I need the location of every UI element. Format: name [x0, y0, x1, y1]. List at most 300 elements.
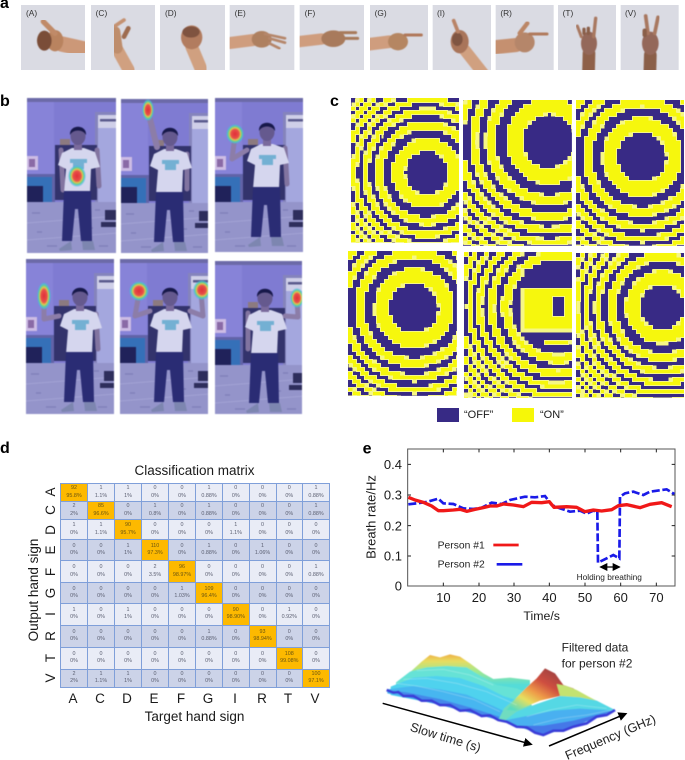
- confusion matrix table: 0: [234, 651, 237, 657]
- photo (A): [21, 5, 92, 70]
- confusion matrix table: 0: [126, 503, 130, 509]
- confusion matrix table: 0%: [232, 493, 240, 499]
- output class labels: T: [43, 654, 58, 662]
- confusion matrix table: 109: [204, 586, 214, 592]
- confusion matrix table: 0%: [178, 493, 186, 499]
- confusion matrix table: 0: [180, 651, 184, 657]
- confusion matrix table: 0: [180, 503, 184, 509]
- photo (C): (C): [96, 8, 107, 18]
- confusion matrix table: 1: [100, 671, 102, 677]
- photo (R): (R): [500, 8, 512, 18]
- photo (D): (D): [165, 8, 177, 18]
- confusion matrix table: 0%: [124, 572, 132, 578]
- confusion matrix table: 90: [125, 522, 131, 528]
- y axis tick labels: 0.2: [384, 518, 402, 533]
- confusion matrix table: 0: [288, 522, 291, 528]
- confusion matrix table: 0%: [312, 658, 320, 664]
- confusion matrix table: 2: [154, 564, 156, 570]
- photo (C): [91, 5, 155, 78]
- confusion matrix table: 0: [100, 564, 102, 570]
- confusion matrix table: 0: [208, 522, 210, 528]
- filtered data callout: [562, 641, 633, 671]
- panel a: hand sign photographs: [0, 0, 679, 70]
- y axis title: Breath rate/Hz: [364, 475, 379, 559]
- confusion matrix table: 1: [234, 522, 237, 528]
- confusion matrix table: 1: [126, 543, 130, 549]
- confusion matrix table: 0: [180, 543, 184, 549]
- confusion matrix table: 1%: [124, 550, 132, 556]
- confusion matrix table: 0: [234, 485, 237, 491]
- confusion matrix table: 1.1%: [230, 530, 242, 536]
- confusion matrix table: 0: [261, 485, 264, 491]
- confusion matrix table: 0%: [124, 658, 132, 664]
- output class labels: G: [43, 588, 58, 598]
- photo (I): [433, 5, 491, 80]
- confusion matrix table: 0%: [97, 614, 105, 620]
- confusion matrix table: 1: [100, 485, 102, 491]
- person 1 solid line: [408, 497, 672, 512]
- photo: arm raised high: [120, 98, 209, 254]
- coding pattern 5: [464, 252, 572, 398]
- confusion matrix table: 0.88%: [201, 493, 217, 499]
- confusion matrix table: 0%: [232, 593, 240, 599]
- confusion matrix table: 1: [100, 522, 102, 528]
- confusion matrix table: 0%: [312, 550, 320, 556]
- confusion matrix table: 0.88%: [308, 511, 324, 517]
- confusion matrix table: 0%: [259, 593, 266, 599]
- confusion matrix table: 85: [98, 503, 104, 509]
- target class labels: T: [284, 691, 292, 706]
- confusion matrix table: 0%: [285, 511, 293, 517]
- confusion matrix table: 1: [126, 671, 130, 677]
- confusion matrix table: 0: [154, 522, 156, 528]
- confusion matrix table: 0%: [205, 678, 213, 684]
- confusion matrix table: 0: [288, 586, 291, 592]
- confusion matrix table: 96: [179, 564, 185, 570]
- output class labels: I: [43, 612, 58, 616]
- confusion matrix table: 96.4%: [201, 593, 217, 599]
- photo (G): [360, 5, 428, 70]
- confusion matrix table: 0%: [97, 658, 105, 664]
- output class labels: R: [43, 631, 58, 641]
- person 2 dashed line: [408, 489, 674, 563]
- photo (T): (T): [563, 8, 574, 18]
- confusion matrix table: 0: [261, 503, 264, 509]
- confusion matrix table: 0%: [151, 658, 159, 664]
- confusion matrix table: 0: [154, 586, 156, 592]
- confusion matrix table: 1: [208, 503, 210, 509]
- confusion matrix table: 0%: [285, 572, 293, 578]
- confusion matrix table: 0%: [151, 636, 159, 642]
- confusion matrix table: 0: [180, 671, 184, 677]
- legend: ON: [512, 408, 564, 422]
- confusion matrix table: 0: [261, 564, 264, 570]
- confusion matrix table: 1: [314, 485, 318, 491]
- confusion matrix table: 0: [261, 607, 264, 613]
- confusion matrix table: 2%: [70, 678, 78, 684]
- confusion matrix table: 0%: [285, 530, 293, 536]
- photo (V): (V): [625, 8, 636, 18]
- y axis tick labels: 0.4: [384, 457, 402, 472]
- confusion matrix table: 0: [154, 485, 156, 491]
- confusion matrix table: 0%: [205, 530, 213, 536]
- confusion matrix table: 1: [72, 607, 76, 613]
- confusion matrix table: 0%: [178, 678, 186, 684]
- confusion matrix table: 0: [234, 503, 237, 509]
- target class labels: F: [177, 691, 185, 706]
- confusion matrix table: 0%: [312, 530, 320, 536]
- confusion matrix table: 0%: [285, 636, 293, 642]
- confusion matrix table: 0%: [232, 658, 240, 664]
- x axis title: Time/s: [523, 609, 560, 623]
- confusion matrix table: 0%: [97, 593, 105, 599]
- confusion matrix table: 97.3%: [147, 550, 163, 556]
- confusion matrix table: 0: [208, 671, 210, 677]
- confusion matrix table: 0%: [151, 614, 159, 620]
- x axis tick labels: 50: [578, 590, 592, 605]
- confusion matrix table: 0: [100, 629, 102, 635]
- confusion matrix table: 0: [234, 543, 237, 549]
- x axis tick labels: 60: [613, 590, 628, 605]
- target class labels: A: [68, 691, 78, 706]
- confusion matrix table: 0: [314, 629, 318, 635]
- confusion matrix table: 0: [288, 503, 291, 509]
- confusion matrix table: 2%: [70, 511, 78, 517]
- legend: OFF: [437, 408, 493, 422]
- confusion matrix table: 0%: [259, 511, 266, 517]
- panel d: classification matrix: [0, 440, 330, 724]
- confusion matrix table: 95.7%: [120, 530, 136, 536]
- confusion matrix table: 0%: [178, 530, 186, 536]
- confusion matrix table: 0%: [259, 530, 266, 536]
- coding pattern 1: [351, 98, 459, 243]
- confusion matrix table: 0: [261, 522, 264, 528]
- confusion matrix table: 1: [261, 543, 264, 549]
- confusion matrix table: 0: [314, 607, 318, 613]
- confusion matrix table: 0%: [285, 550, 293, 556]
- filtered data callout: Filtered data: [562, 641, 629, 655]
- x axis tick labels: 10: [436, 590, 451, 605]
- confusion matrix table: 0%: [124, 511, 132, 517]
- confusion matrix table: 100: [312, 671, 320, 677]
- photo (F): (F): [305, 8, 316, 18]
- target class labels: R: [257, 691, 267, 706]
- confusion matrix table: 108: [285, 651, 294, 657]
- confusion matrix table: [60, 483, 330, 688]
- confusion matrix table: 0%: [312, 593, 320, 599]
- x axis tick labels: [436, 590, 664, 605]
- confusion matrix table: 2: [72, 671, 76, 677]
- confusion matrix table: 0: [154, 629, 156, 635]
- confusion matrix table: 0%: [178, 550, 186, 556]
- confusion matrix table: 0%: [259, 678, 266, 684]
- confusion matrix table: 0: [234, 564, 237, 570]
- confusion matrix table: 0: [100, 607, 102, 613]
- coding pattern 6: [576, 253, 684, 398]
- confusion matrix table: 1: [288, 607, 291, 613]
- legend: OFF: “OFF”: [464, 409, 493, 421]
- confusion matrix table: 0: [234, 629, 237, 635]
- confusion matrix table: 0%: [97, 636, 105, 642]
- confusion matrix table: 0: [100, 586, 102, 592]
- confusion matrix table: 99.08%: [280, 658, 298, 664]
- confusion matrix table: 0%: [232, 636, 240, 642]
- confusion matrix table: 0: [261, 671, 264, 677]
- panel e: breath rate chart: [363, 440, 676, 623]
- confusion matrix table: 0.88%: [201, 636, 217, 642]
- holding breathing arrow: [601, 565, 619, 569]
- confusion matrix table: 0%: [178, 511, 186, 517]
- confusion matrix table: 0%: [178, 636, 186, 642]
- target class labels: D: [122, 691, 132, 706]
- legend: person 2: Person #2: [438, 559, 485, 570]
- photo (I): (I): [437, 8, 445, 18]
- confusion matrix table: 1%: [124, 678, 132, 684]
- confusion matrix table: 0: [314, 543, 318, 549]
- output class labels: A: [43, 487, 58, 497]
- target class labels: E: [149, 691, 159, 706]
- confusion matrix table: 1: [126, 607, 130, 613]
- holding breathing label: Holding breathing: [577, 572, 642, 582]
- coding pattern 2: [463, 100, 572, 246]
- confusion matrix table: 0%: [205, 614, 213, 620]
- confusion matrix table: 1.06%: [255, 550, 270, 556]
- confusion matrix table: 97.1%: [308, 678, 324, 684]
- confusion matrix table: 0%: [232, 572, 240, 578]
- y axis tick labels: 0.1: [384, 549, 402, 564]
- confusion matrix table: 0: [72, 564, 76, 570]
- photo (F): [290, 5, 364, 70]
- output class labels: [43, 487, 58, 683]
- confusion matrix table: 0%: [178, 614, 186, 620]
- confusion matrix table: 0.92%: [282, 614, 297, 620]
- confusion matrix table: 0%: [285, 493, 293, 499]
- target class labels: C: [95, 691, 105, 706]
- y axis title: Output hand sign: [26, 539, 41, 641]
- confusion matrix table: 0%: [151, 493, 159, 499]
- confusion matrix table: 0: [288, 543, 291, 549]
- confusion matrix table: 0%: [70, 550, 78, 556]
- confusion matrix table: 0: [180, 522, 184, 528]
- panel c: metasurface coding patterns: [330, 93, 684, 422]
- photo: hand on torso: [26, 97, 117, 254]
- legend: person 1: Person #1: [438, 541, 485, 552]
- slow time arrow: [383, 703, 531, 744]
- confusion matrix table: 0: [314, 651, 318, 657]
- confusion matrix table: 0%: [178, 658, 186, 664]
- confusion matrix table: 98.94%: [253, 636, 272, 642]
- photo (E): (E): [235, 8, 246, 18]
- x axis tick labels: 70: [649, 590, 664, 605]
- confusion matrix table: 0%: [124, 593, 132, 599]
- confusion matrix table: 1: [208, 485, 210, 491]
- confusion matrix table: 2: [72, 503, 76, 509]
- confusion matrix table: 0%: [259, 614, 266, 620]
- photo: left arm bent: [25, 258, 115, 415]
- confusion matrix table: 0: [72, 629, 76, 635]
- confusion matrix table: 90: [233, 607, 239, 613]
- target class labels: I: [233, 691, 237, 706]
- target class labels: [68, 691, 320, 706]
- confusion matrix table: 0%: [232, 550, 240, 556]
- target class labels: G: [203, 691, 213, 706]
- surface mesh: [387, 654, 615, 735]
- confusion matrix table: 98.97%: [173, 572, 191, 578]
- confusion matrix table: 0%: [70, 530, 78, 536]
- confusion matrix table: 1: [154, 503, 156, 509]
- filtered data callout: for person #2: [562, 657, 633, 671]
- confusion matrix table: 0: [208, 651, 210, 657]
- confusion matrix table: 0.88%: [308, 572, 324, 578]
- x axis tick labels: 30: [507, 590, 521, 605]
- panel label e: e: [363, 440, 372, 457]
- confusion matrix table: 0%: [70, 658, 78, 664]
- output class labels: F: [43, 568, 58, 576]
- confusion matrix table: 1%: [124, 614, 132, 620]
- confusion matrix table: 0: [180, 485, 184, 491]
- confusion matrix table: 0: [72, 586, 76, 592]
- output class labels: D: [43, 525, 58, 535]
- x axis tick labels: 20: [472, 590, 486, 605]
- confusion matrix table: 93: [260, 629, 266, 635]
- confusion matrix table: 0: [261, 586, 264, 592]
- confusion matrix table: 0%: [70, 572, 78, 578]
- matrix title: Classification matrix: [134, 463, 255, 478]
- confusion matrix table: 0%: [312, 636, 320, 642]
- panel label c: c: [330, 93, 339, 110]
- photo (R): [487, 5, 554, 70]
- confusion matrix table: 0: [261, 651, 264, 657]
- output class labels: E: [43, 545, 58, 555]
- photo (T): [558, 5, 616, 80]
- confusion matrix table: 1: [126, 485, 130, 491]
- confusion matrix table: 0: [126, 586, 130, 592]
- confusion matrix table: 0: [100, 651, 102, 657]
- confusion matrix table: 0%: [285, 593, 293, 599]
- confusion matrix table: 0%: [70, 593, 78, 599]
- 3D filtered data surface: [382, 641, 658, 760]
- chart frame and ticks: [408, 449, 675, 586]
- confusion matrix table: 0.88%: [201, 550, 217, 556]
- confusion matrix table: 0: [126, 651, 130, 657]
- confusion matrix table: 0%: [151, 678, 159, 684]
- hand sign photo row: [21, 5, 679, 70]
- confusion matrix table: 92: [71, 485, 77, 491]
- confusion matrix table: 96.6%: [93, 511, 109, 517]
- confusion matrix table: 0%: [97, 572, 105, 578]
- panel label b: b: [0, 93, 10, 110]
- confusion matrix table: 0: [314, 586, 318, 592]
- confusion matrix table: 0%: [205, 658, 213, 664]
- confusion matrix table: 3.5%: [149, 572, 161, 578]
- coding pattern 4: [348, 251, 457, 396]
- y axis tick labels: 0: [395, 579, 402, 594]
- confusion matrix table: 0: [100, 543, 102, 549]
- confusion matrix table: 1.1%: [95, 493, 107, 499]
- coding pattern 3: [576, 100, 684, 246]
- confusion matrix table: 0: [154, 651, 156, 657]
- confusion matrix table: 1: [180, 586, 184, 592]
- confusion matrix table: 0%: [151, 593, 159, 599]
- x axis tick labels: 40: [542, 590, 557, 605]
- confusion matrix table: 0.8%: [149, 511, 161, 517]
- confusion matrix table: 1: [314, 564, 318, 570]
- confusion matrix table: 0%: [124, 636, 132, 642]
- confusion matrix table: 0: [208, 564, 210, 570]
- y axis tick labels: [384, 457, 402, 594]
- confusion matrix table: 0: [288, 629, 291, 635]
- confusion matrix table: 0%: [70, 636, 78, 642]
- confusion matrix table: 1%: [124, 493, 132, 499]
- confusion matrix table: 0%: [97, 550, 105, 556]
- output class labels: C: [43, 505, 58, 515]
- confusion matrix table: 0: [180, 629, 184, 635]
- confusion matrix table: 0.88%: [201, 511, 217, 517]
- photo (V): [621, 5, 679, 80]
- confusion matrix table: 0%: [259, 493, 266, 499]
- photo (A): (A): [26, 8, 37, 18]
- confusion matrix table: 1.1%: [95, 530, 107, 536]
- confusion matrix table: 0%: [232, 678, 240, 684]
- confusion matrix table: 0: [154, 607, 156, 613]
- frequency arrow: [549, 714, 626, 746]
- confusion matrix table: 0: [234, 586, 237, 592]
- confusion matrix table: 1: [314, 503, 318, 509]
- confusion matrix table: 1: [208, 543, 210, 549]
- confusion matrix table: 0: [72, 651, 76, 657]
- legend: ON: “ON”: [540, 409, 564, 421]
- confusion matrix table: 1.1%: [95, 678, 107, 684]
- confusion matrix table: 0.88%: [308, 493, 324, 499]
- output class labels: V: [43, 673, 58, 683]
- panel b: radar heat map photographs: [0, 93, 304, 415]
- confusion matrix table: 0%: [151, 530, 159, 536]
- confusion matrix table: 0: [72, 543, 76, 549]
- confusion matrix table: 98.90%: [227, 614, 245, 620]
- photo (D): [160, 5, 225, 78]
- confusion matrix table: 0: [288, 564, 291, 570]
- photo: both arms raised: [119, 258, 209, 415]
- confusion matrix table: 110: [151, 543, 159, 549]
- confusion matrix table: 0: [154, 671, 156, 677]
- confusion matrix table: 0: [234, 671, 237, 677]
- confusion matrix table: 0%: [70, 614, 78, 620]
- photo: right arm bent: [214, 260, 303, 415]
- photo (E): [220, 5, 294, 70]
- slow time label: Slow time (s): [408, 720, 482, 755]
- confusion matrix table: 1: [208, 629, 210, 635]
- legend: person 1: [438, 541, 519, 552]
- confusion matrix table: 0: [288, 485, 291, 491]
- x axis title: Target hand sign: [145, 709, 244, 724]
- confusion matrix table: 0%: [259, 658, 266, 664]
- photo: left hand beside head: [214, 97, 304, 253]
- confusion matrix table: 0%: [259, 572, 266, 578]
- confusion matrix table: 0: [180, 607, 184, 613]
- confusion matrix table: 0: [208, 607, 210, 613]
- confusion matrix table: 0%: [232, 511, 240, 517]
- confusion matrix table: 0%: [312, 614, 320, 620]
- confusion matrix table: 0%: [205, 572, 213, 578]
- legend: person 2: [438, 559, 522, 570]
- target class labels: V: [310, 691, 320, 706]
- confusion matrix table: 95.8%: [66, 493, 82, 499]
- confusion matrix table: 1.03%: [174, 593, 190, 599]
- confusion matrix table: 0: [314, 522, 318, 528]
- confusion matrix table: 0: [288, 671, 291, 677]
- confusion matrix table: 1: [72, 522, 76, 528]
- confusion matrix table: 0%: [285, 678, 293, 684]
